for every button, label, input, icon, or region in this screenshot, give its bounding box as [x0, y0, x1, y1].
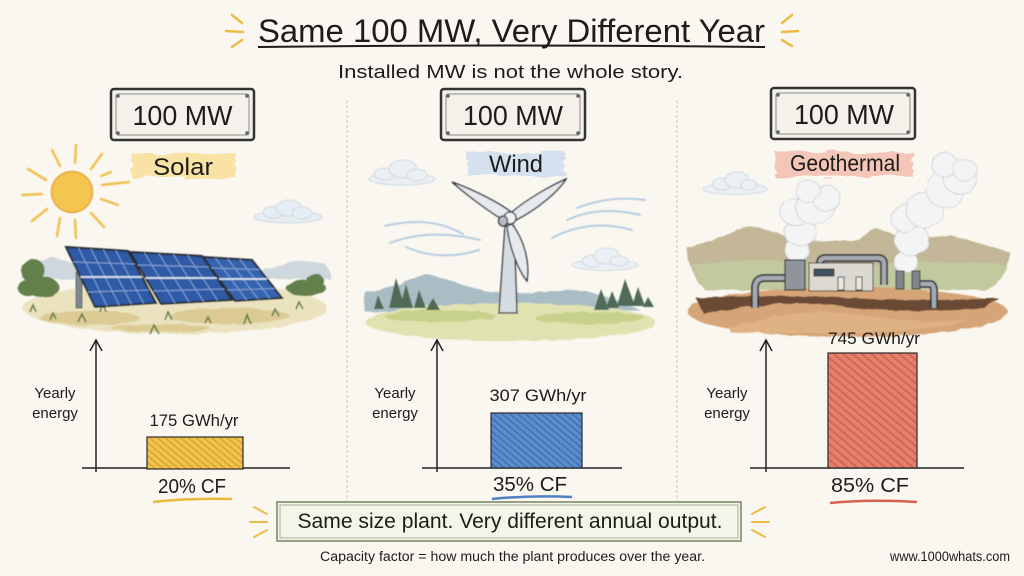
- fissure: [696, 296, 1000, 314]
- axis label: energy: [704, 405, 750, 422]
- axes: [750, 340, 964, 472]
- ground: [688, 287, 1008, 337]
- footnote: Capacity factor = how much the plant produces over the year.: [320, 549, 705, 564]
- icon: turbine: [452, 179, 566, 313]
- distant mountains: [20, 257, 330, 280]
- capacity plaque: wind: [441, 89, 585, 140]
- soil patches: [40, 308, 290, 332]
- capacity factor: wind: 35% CF: [493, 474, 567, 496]
- panel: wind: [365, 89, 655, 499]
- chart: wind yearly energy: [372, 340, 622, 499]
- sandy ridge: [730, 312, 975, 334]
- ground: [23, 282, 327, 334]
- axis label: energy: [32, 405, 78, 422]
- icon: cloud: [572, 248, 638, 270]
- steam: left: [780, 180, 840, 262]
- icon: solar panel 3: [203, 257, 282, 301]
- callout: Same size plant. Very different annual output.: [298, 510, 722, 533]
- trees left: [374, 278, 440, 310]
- icon: solar panel 1: [66, 247, 156, 307]
- label: wind: [467, 151, 565, 178]
- mountains: [686, 225, 1010, 285]
- illustration: geothermal plant: [686, 153, 1010, 337]
- grass tufts: [30, 302, 303, 334]
- axis label: Yearly: [706, 385, 748, 402]
- chart: geothermal yearly energy: [704, 329, 964, 503]
- callout: [277, 502, 741, 541]
- icon: callout accent right: [752, 507, 769, 537]
- column dividers: [347, 100, 677, 505]
- icon: title accent right: [782, 15, 798, 46]
- wind lines right: [552, 199, 645, 238]
- icon: solar panel 2: [130, 252, 232, 304]
- value: wind: 307 GWh/yr: [490, 386, 587, 405]
- axes: [422, 340, 622, 472]
- building: [809, 263, 873, 291]
- bushes: [18, 259, 326, 297]
- trees right: [594, 279, 654, 310]
- value: geothermal: 745 GWh/yr: [828, 329, 920, 348]
- capacity plaque: solar: [111, 89, 254, 140]
- foothills: [692, 261, 1006, 290]
- axis label: Yearly: [34, 385, 76, 402]
- icon: callout accent left: [250, 507, 267, 537]
- panel: solar: [18, 89, 330, 502]
- wellheads: [896, 271, 920, 289]
- capacity plaque: geothermal: [771, 88, 915, 139]
- icon: cloud: [369, 160, 435, 185]
- steam: right: [891, 153, 977, 273]
- wind lines left: [385, 222, 480, 255]
- illustration: wind turbine: [365, 160, 655, 341]
- axis label: Yearly: [374, 385, 416, 402]
- bar: wind: [491, 413, 582, 468]
- panel: geothermal: [686, 88, 1010, 503]
- icon: cloud: [254, 200, 322, 223]
- capacity factor: solar: 20% CF: [158, 476, 226, 498]
- bar: solar: [147, 437, 243, 469]
- post: [76, 272, 82, 308]
- icon: sun: [22, 145, 129, 238]
- meadow patches: [385, 310, 645, 324]
- bar: geothermal: [828, 353, 917, 468]
- illustration: solar farm: [18, 145, 330, 334]
- ground: [365, 303, 655, 341]
- subtitle: Installed MW is not the whole story.: [338, 62, 683, 82]
- hills: [365, 274, 640, 312]
- axes: [82, 340, 290, 472]
- icon: title accent left: [226, 15, 243, 47]
- capacity factor: geothermal: 85% CF: [831, 475, 909, 497]
- capacity plaque: geothermal: 100 MW: [794, 99, 895, 130]
- capacity plaque: wind: 100 MW: [463, 100, 564, 131]
- source url: www.1000whats.com: [889, 549, 1010, 564]
- capacity plaque: solar: 100 MW: [132, 100, 233, 131]
- label: solar: [132, 153, 236, 181]
- title: Same 100 MW, Very Different Year: [258, 13, 765, 49]
- chart: solar yearly energy: [32, 340, 290, 502]
- label: solar: Solar: [153, 154, 213, 181]
- label: geothermal: Geothermal: [790, 150, 900, 176]
- cooling tank: [785, 260, 805, 290]
- pipes: [755, 258, 934, 308]
- value: solar: 175 GWh/yr: [150, 411, 239, 430]
- label: wind: Wind: [489, 151, 543, 178]
- icon: cloud: [703, 172, 767, 194]
- axis label: energy: [372, 405, 418, 422]
